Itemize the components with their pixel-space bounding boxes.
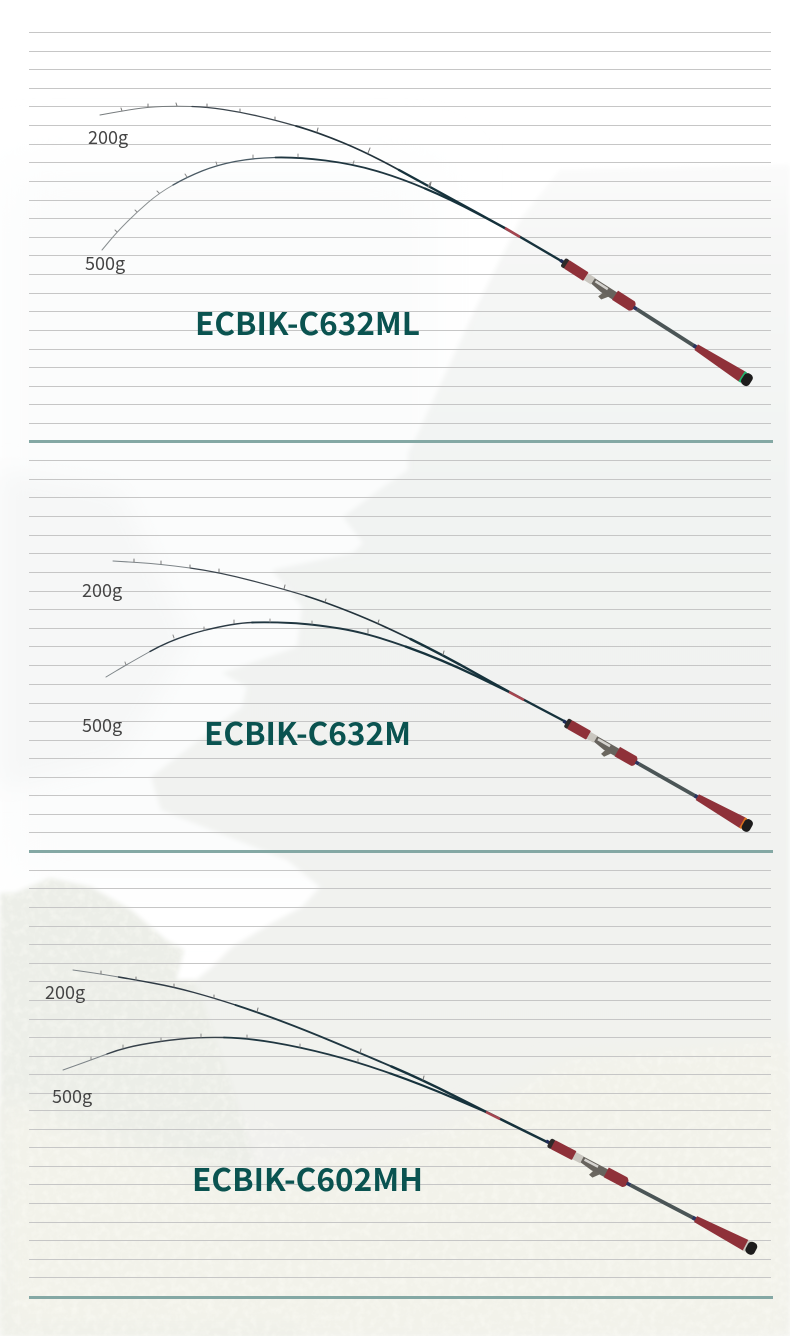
rod curve: 500g [106, 619, 509, 692]
section divider 2 [29, 850, 773, 853]
rod curve: 500g [102, 154, 505, 250]
ruled lines: section 3 [29, 870, 771, 1278]
rod curve: 200g [113, 559, 566, 722]
section divider 3 [29, 1296, 773, 1299]
weight label 500g: 500g [52, 1083, 92, 1109]
panel: ECBIK-C602MH [45, 970, 759, 1260]
ruled lines: section 2 [29, 460, 771, 832]
weight label 200g: 200g [45, 979, 85, 1005]
rod curve: 200g [73, 970, 549, 1143]
model name: ECBIK-C632M [204, 709, 411, 754]
model name: ECBIK-C602MH [192, 1155, 423, 1200]
rod thread wrap [486, 1112, 500, 1119]
rod curve: 200g [100, 103, 563, 262]
rod handle [541, 1135, 759, 1260]
rod handle [558, 715, 754, 837]
rod handle [554, 255, 754, 391]
model name: ECBIK-C632ML [195, 299, 420, 344]
panel: ECBIK-C632ML [85, 103, 754, 391]
ruled lines: section 1 [29, 32, 771, 424]
weight label 200g: 200g [88, 124, 128, 150]
weight label 500g: 500g [82, 712, 122, 738]
section divider 1 [29, 440, 773, 443]
panel: ECBIK-C632M [82, 559, 754, 837]
weight label 200g: 200g [82, 577, 122, 603]
rod thread wrap [509, 692, 524, 700]
rod thread wrap [505, 228, 520, 237]
rod curve: 500g [63, 1034, 486, 1112]
weight label 500g: 500g [85, 250, 125, 276]
